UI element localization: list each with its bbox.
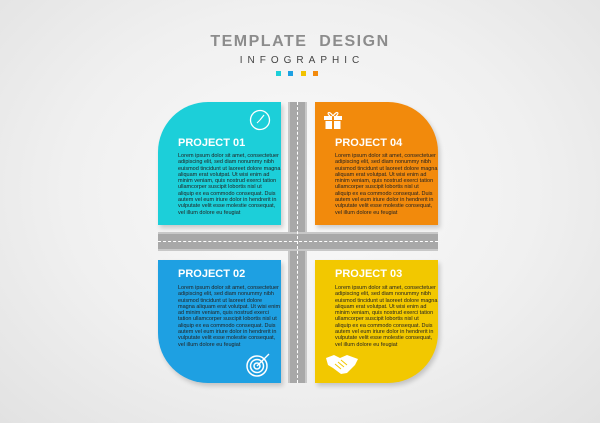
- text: Lorem ipsum dolor sit amet, consectetuer: [335, 285, 436, 291]
- panel: project 03: [315, 260, 438, 383]
- text: aliquip ex ea commodo consequat. Duis: [335, 191, 433, 197]
- text: aliquam erat volutpat. Ut wisi enim ad: [335, 304, 426, 310]
- text: [335, 285, 438, 348]
- text: minim veniam, quis nostrud exerci tation: [335, 310, 433, 316]
- text: vel illum dolore eu feugiat: [178, 342, 240, 348]
- heading: PROJECT 04: [335, 137, 402, 149]
- icon: gift: [324, 112, 342, 129]
- text: euismod tincidunt ut laoreet dolore: [178, 298, 262, 304]
- road: [158, 102, 438, 383]
- text: euismod tincidunt ut laoreet dolore magna: [335, 166, 437, 172]
- text: vel illum dolore eu feugiat: [335, 210, 397, 216]
- title: TEMPLATE DESIGN: [210, 33, 390, 50]
- text: vel illum dolore eu feugiat: [335, 342, 397, 348]
- text: aliquip ex ea commodo consequat. Duis: [178, 323, 276, 329]
- icon: clock: [250, 110, 270, 130]
- text: [178, 153, 280, 216]
- heading: PROJECT 03: [335, 268, 402, 280]
- text: [335, 153, 438, 216]
- text: ullamcorper suscipit lobortis nisl ut: [335, 316, 419, 322]
- text: vulputate velit esse molestie consequat,: [335, 203, 432, 209]
- text: adipiscing elit, sed diam nonummy nibh: [335, 291, 431, 297]
- text: vulputate velit esse molestie consequat,: [335, 335, 432, 341]
- heading: PROJECT 02: [178, 268, 245, 280]
- panel: project 02: [158, 260, 281, 383]
- text: tation ullamcorper suscipit lobortis nisl ut: [178, 316, 277, 322]
- text: adipiscing elit, sed diam nonummy nibh: [335, 159, 431, 165]
- icon: target: [246, 354, 270, 377]
- text: Lorem ipsum dolor sit amet, consectetuer: [178, 153, 279, 159]
- text: vulputate velit esse molestie consequat,: [178, 335, 275, 341]
- subtitle: INFOGRAPHIC: [240, 55, 364, 66]
- text: euismod tincidunt ut laoreet dolore magna: [335, 298, 437, 304]
- text: magna aliquam erat volutpat. Ut wisi enim: [178, 304, 280, 310]
- text: aliquam erat volutpat. Ut wisi enim ad: [178, 172, 269, 178]
- text: euismod tincidunt ut laoreet dolore magna: [178, 166, 280, 172]
- text: autem vel eum iriure dolor in hendrerit in: [178, 197, 276, 203]
- text: Lorem ipsum dolor sit amet, consectetuer: [178, 285, 279, 291]
- text: ullamcorper suscipit lobortis nisl ut: [335, 184, 419, 190]
- text: Lorem ipsum dolor sit amet, consectetuer: [335, 153, 436, 159]
- text: minim veniam, quis nostrud exerci tation: [335, 178, 433, 184]
- text: aliquip ex ea commodo consequat. Duis: [335, 323, 433, 329]
- text: ad minim veniam, quis nostrud exerci: [178, 310, 269, 316]
- heading: PROJECT 01: [178, 137, 245, 149]
- text: autem vel eum iriure dolor in hendrerit in: [335, 329, 433, 335]
- panel: project 04: [315, 102, 438, 225]
- text: vel illum dolore eu feugiat: [178, 210, 240, 216]
- text: minim veniam, quis nostrud exerci tation: [178, 178, 276, 184]
- text: vulputate velit esse molestie consequat,: [178, 203, 275, 209]
- text: [178, 285, 280, 348]
- panel: project 01: [158, 102, 281, 225]
- text: adipiscing elit, sed diam nonummy nibh: [178, 159, 274, 165]
- text: adipiscing elit, sed diam nonummy nibh: [178, 291, 274, 297]
- color squares: [276, 71, 318, 76]
- text: aliquip ex ea commodo consequat. Duis: [178, 191, 276, 197]
- text: autem vel eum iriure dolor in hendrerit in: [335, 197, 433, 203]
- text: autem vel eum iriure dolor in hendrerit in: [178, 329, 276, 335]
- text: aliquam erat volutpat. Ut wisi enim ad: [335, 172, 426, 178]
- text: ullamcorper suscipit lobortis nisl ut: [178, 184, 262, 190]
- icon: handshake: [326, 355, 358, 374]
